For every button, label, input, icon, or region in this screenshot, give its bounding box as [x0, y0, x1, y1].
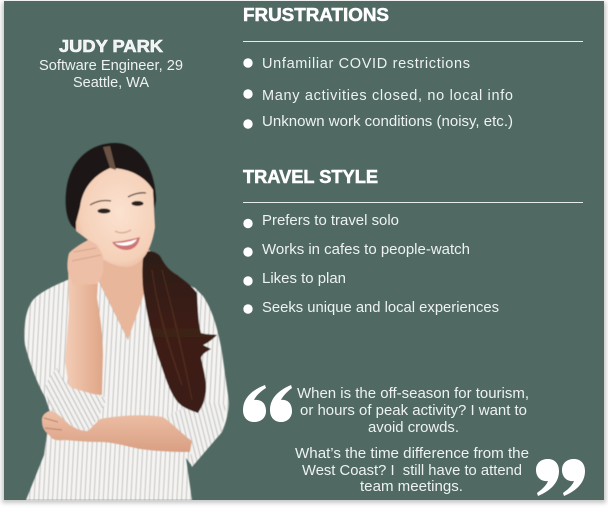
portrait: woman with folded arms: [24, 143, 229, 500]
section: frustrations: [243, 5, 583, 130]
heading: persona name and details: JUDY PARK: [59, 36, 163, 56]
crossed forearm and hand: [42, 411, 192, 452]
quote: time difference: [295, 446, 529, 495]
quote: time difference: team meetings.: [360, 479, 463, 495]
mouth: [112, 237, 140, 250]
heading: frustrations: FRUSTRATIONS: [243, 5, 389, 25]
icon: opening quotation mark: [243, 385, 292, 422]
eyebrows: [90, 200, 111, 205]
raised forearm: [65, 264, 103, 395]
heading: persona name and details: Software Engineer, 29: [39, 58, 183, 74]
hair top: [66, 143, 156, 238]
section: travel style: [243, 167, 583, 316]
bullet list: frustrations: Unknown work conditions (noisy, etc.): [262, 114, 513, 130]
shirt body: [24, 272, 229, 500]
face: [76, 168, 155, 267]
icon: closing quotation mark: [536, 459, 585, 496]
hair part: [103, 146, 116, 170]
bullet list: frustrations: [243, 56, 513, 130]
ponytail: [142, 251, 217, 413]
bullet list: frustrations: Unfamiliar COVID restrictions: [262, 56, 470, 72]
heading: travel style: TRAVEL STYLE: [243, 167, 378, 187]
eyes: [98, 208, 110, 214]
fingers: [44, 418, 62, 430]
neck and chest: [97, 250, 150, 340]
quote: off-season: avoid crowds.: [368, 420, 459, 436]
bullet list: travel style: Seeks unique and local experiences: [262, 300, 499, 316]
rolled sleeve: [45, 368, 107, 430]
nose shadow: [115, 230, 131, 233]
quote: time difference: West Coast? I still have to attend: [302, 463, 522, 479]
raised hand: [67, 240, 103, 285]
heading: persona name and details: Seattle, WA: [73, 75, 149, 91]
bullet list: travel style: Works in cafes to people-watch: [262, 242, 470, 258]
quote: off-season: [297, 386, 529, 436]
quote: off-season: or hours of peak activity? I want to: [300, 403, 527, 419]
bullet list: travel style: Prefers to travel solo: [262, 213, 399, 229]
heading: persona name and details: [39, 36, 183, 91]
bullet list: travel style: [243, 213, 499, 316]
quote: time difference: What’s the time difference from the: [295, 446, 529, 462]
bullet list: travel style: Likes to plan: [262, 271, 346, 287]
bullet list: frustrations: Many activities closed, no local info: [262, 88, 513, 104]
quote: off-season: When is the off-season for tourism,: [297, 386, 529, 402]
right sleeve cuff: [163, 400, 226, 467]
